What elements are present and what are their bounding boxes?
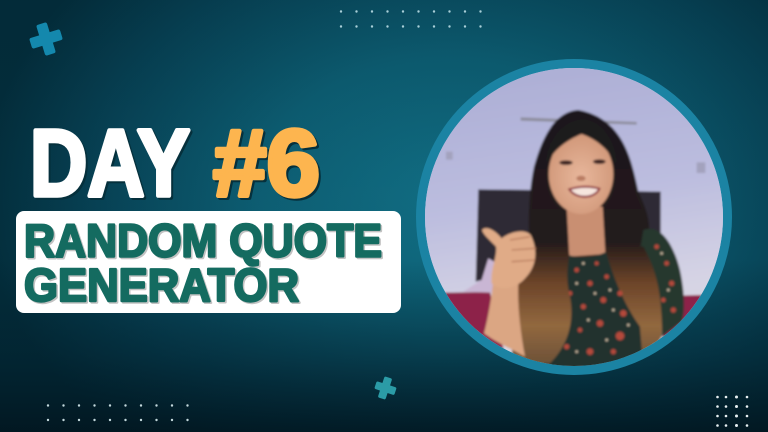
eyes <box>559 159 606 165</box>
heading: DAY #6: #6 <box>215 112 322 218</box>
bed <box>445 290 702 349</box>
back hair <box>512 110 662 370</box>
hand with thumb <box>482 228 535 288</box>
face <box>549 134 613 214</box>
finger creases <box>510 237 536 262</box>
dot grid: bottom left <box>47 404 189 421</box>
wall marks <box>446 152 705 173</box>
heading: DAY #6: DAY <box>32 112 192 218</box>
icon: blue plus top left <box>26 19 66 59</box>
subtitle: RANDOM QUOTE GENERATOR: GENERATOR <box>24 259 299 311</box>
neck <box>567 207 605 257</box>
ceiling light bar <box>521 117 637 125</box>
subtitle: RANDOM QUOTE GENERATOR: RANDOM QUOTE <box>24 214 382 266</box>
subtitle: RANDOM QUOTE GENERATOR: GENERATOR <box>26 260 300 312</box>
smile <box>569 187 599 197</box>
nose shadow <box>576 176 586 181</box>
circular photo frame <box>420 64 728 370</box>
icon: teal plus bottom centre <box>372 374 399 402</box>
sleeve <box>640 229 684 337</box>
photo: woman giving thumbs up <box>425 68 723 366</box>
dot grid: top <box>340 10 482 28</box>
dress <box>542 252 643 370</box>
arm <box>484 280 525 357</box>
front hair strands <box>544 246 662 364</box>
heading: DAY #6: DAY <box>30 110 190 216</box>
subtitle: RANDOM QUOTE GENERATOR <box>24 214 384 312</box>
print highlights <box>575 252 670 353</box>
heading: DAY #6: #6 <box>213 110 320 216</box>
floral print <box>564 244 676 355</box>
headboard <box>476 189 661 282</box>
white title box <box>16 211 401 313</box>
subtitle: RANDOM QUOTE GENERATOR: RANDOM QUOTE <box>26 216 384 268</box>
pillow <box>463 258 497 293</box>
hair over forehead <box>552 132 610 154</box>
heading: DAY #6 <box>30 110 322 218</box>
photo wall <box>425 68 723 353</box>
dot grid: bottom right <box>716 396 748 427</box>
